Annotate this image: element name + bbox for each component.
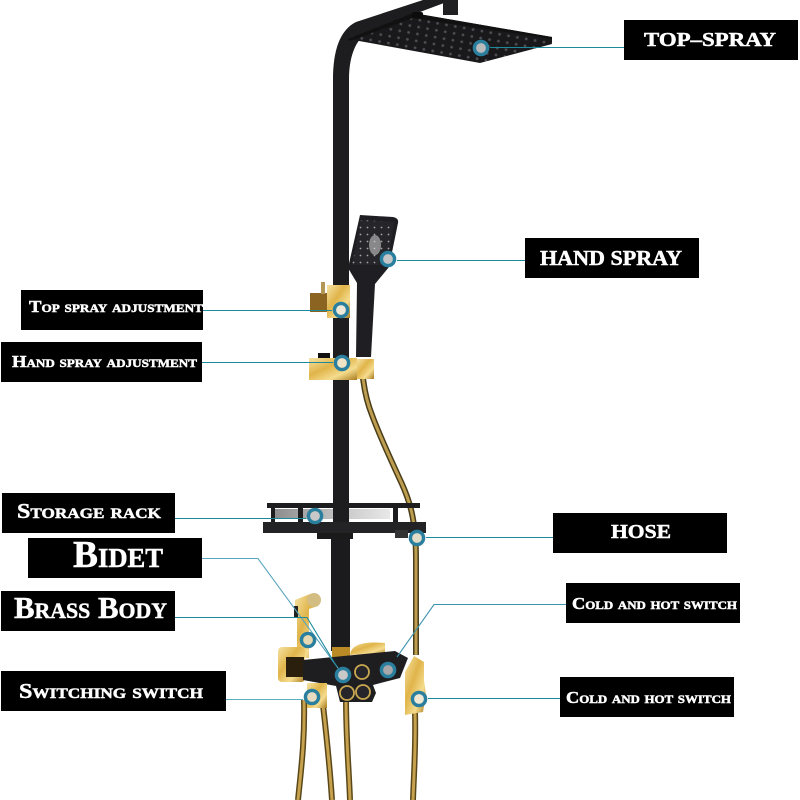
bidet sprayer — [294, 593, 321, 658]
hand spray adjustment bracket — [309, 353, 374, 380]
riser pipe — [333, 0, 452, 505]
label: cold and hot switch (lower): Cold and hot switch — [566, 688, 732, 707]
hose to hand spray — [363, 378, 416, 655]
leader lines — [175, 48, 624, 700]
hotspot markers — [301, 41, 488, 706]
label: bidet — [28, 534, 202, 578]
hand spray — [348, 215, 398, 357]
label: hose — [553, 513, 727, 553]
label: cold and hot switch (upper) — [566, 583, 740, 623]
mixer valve body — [278, 642, 426, 715]
label: hand spray adjustment — [1, 342, 202, 382]
shower column — [331, 0, 452, 651]
switch buttons — [340, 665, 370, 700]
hoses below valve — [298, 698, 415, 800]
label: hand spray adjustment: Hand spray adjustment — [12, 352, 197, 371]
label: bidet: Bidet — [73, 534, 163, 576]
lower pipe — [331, 533, 350, 651]
label: switching switch — [1, 671, 226, 711]
label: cold and hot switch (lower) — [560, 677, 734, 717]
label: switching switch: Switching switch — [19, 679, 203, 703]
label: top spray adjustment — [21, 290, 203, 330]
label: top spray adjustment: Top spray adjustment — [29, 297, 203, 316]
label: storage rack: Storage rack — [17, 499, 161, 523]
label: hand spray: HAND SPRAY — [540, 246, 682, 270]
label: brass body: Brass Body — [14, 590, 167, 625]
label: top-spray: TOP–SPRAY — [644, 29, 777, 51]
label: top-spray — [624, 20, 798, 60]
storage rack — [263, 503, 426, 539]
top spray adjustment bracket — [310, 282, 350, 318]
label: hand spray — [525, 238, 699, 278]
label: hose: HOSE — [611, 521, 671, 543]
label: storage rack — [2, 493, 175, 533]
label: cold and hot switch (upper): Cold and hot switch — [572, 594, 738, 613]
top spray head — [348, 0, 552, 63]
